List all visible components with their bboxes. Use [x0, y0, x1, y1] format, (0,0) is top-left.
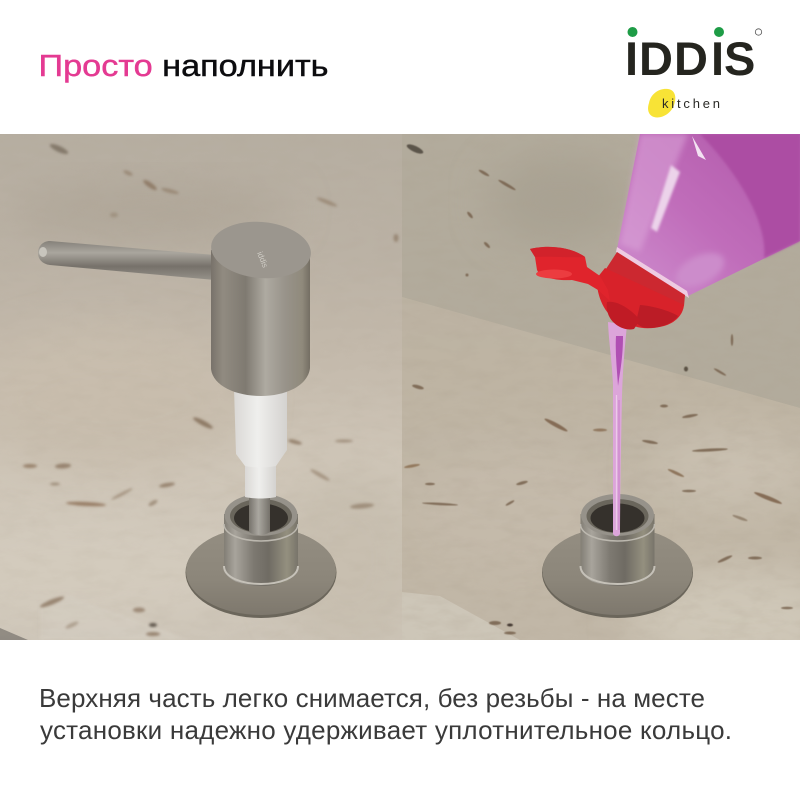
dispenser head: iddis — [255, 250, 270, 269]
caption text: Верхняя часть легко снимается, без резьбы - на месте — [39, 683, 705, 713]
caption text — [39, 683, 732, 745]
red cap — [597, 252, 685, 329]
dispenser head — [209, 218, 313, 396]
title: Просто наполнить — [38, 48, 328, 83]
dispenser handle — [38, 241, 215, 280]
open flip lid — [530, 246, 599, 290]
detergent bottle — [616, 134, 800, 298]
caption text: установки надежно удерживает уплотнительное кольцо. — [40, 715, 732, 745]
logo: IDDIS kitchen: IDDIS — [625, 32, 755, 85]
bottle neck rings — [616, 247, 689, 298]
travertine surface right — [402, 134, 800, 670]
mount fitting with flange — [542, 494, 693, 618]
left photo panel: dispenser assembled above mount — [0, 134, 420, 650]
logo: IDDIS kitchen — [625, 27, 762, 117]
pump tube and rod — [234, 388, 287, 535]
logo: IDDIS kitchen: kitchen — [662, 96, 720, 111]
detergent stream — [608, 322, 627, 536]
mount fitting with flange — [186, 494, 336, 618]
right photo panel: pouring detergent — [402, 134, 800, 670]
travertine surface left — [0, 134, 420, 650]
